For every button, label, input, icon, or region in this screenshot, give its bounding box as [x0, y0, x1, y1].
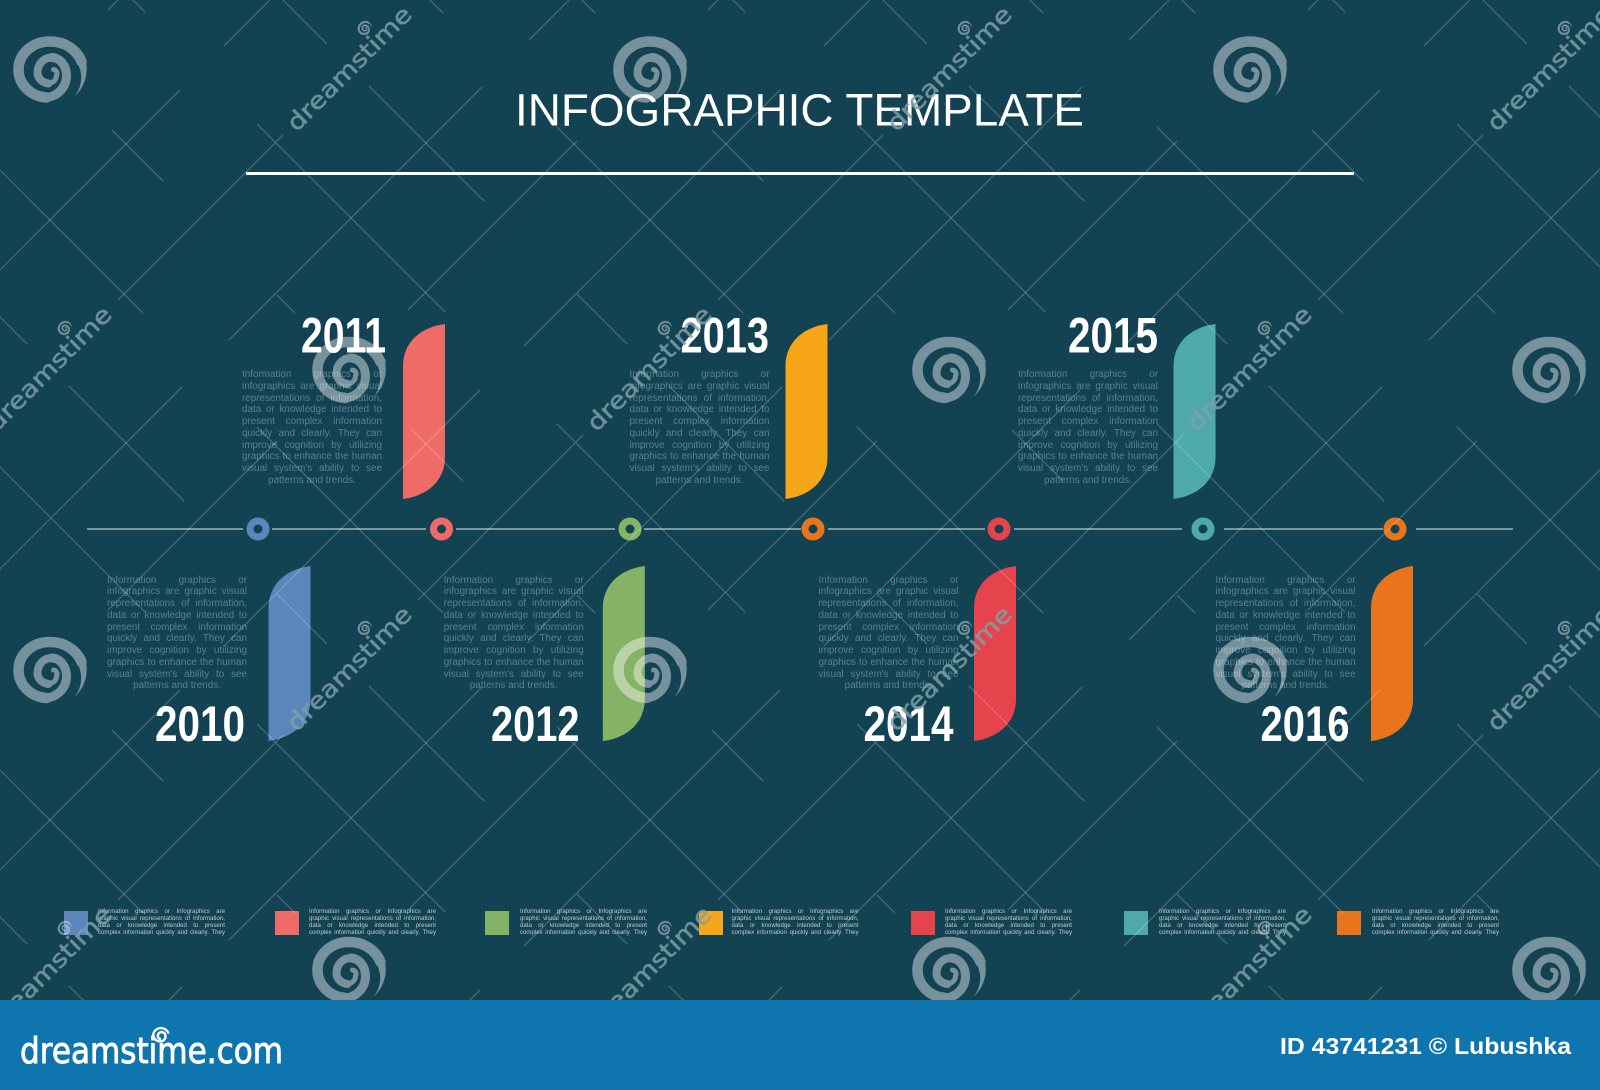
description text: visual system's ability to see	[444, 669, 584, 680]
logo spiral	[153, 1028, 168, 1041]
legend item: blue	[64, 908, 225, 936]
year label 2010: 2010	[155, 696, 245, 752]
legend item: red: data or knowledge intended to present	[945, 922, 1072, 929]
description text: Information graphics or	[818, 575, 958, 586]
description text: quickly and clearly. They can	[242, 428, 382, 439]
description text: graphics to enhance the human	[818, 657, 958, 668]
description text: graphics to enhance the human	[107, 657, 247, 668]
node 2012	[622, 521, 638, 537]
legend item: amber	[699, 908, 858, 936]
description text: visual system's ability to see	[1018, 463, 1158, 474]
description text: infographics are graphic visual	[444, 586, 584, 597]
description text: patterns and trends.	[845, 680, 932, 691]
description text: patterns and trends.	[268, 475, 356, 486]
title: INFOGRAPHIC TEMPLATE	[515, 84, 1084, 136]
description text	[1018, 369, 1158, 486]
description text: representations of information,	[630, 392, 770, 404]
legend item: red: Information graphics or Infographics are	[945, 908, 1072, 914]
description text: present complex information	[107, 622, 247, 633]
year and tab: 2015	[1068, 308, 1216, 499]
description text: visual system's ability to see	[1216, 669, 1356, 680]
description text: representations of information,	[444, 598, 584, 609]
year label 2011: 2011	[301, 308, 386, 364]
panel: 2010	[107, 566, 310, 752]
description text: data or knowledge intended to	[242, 404, 382, 415]
node 2015	[1195, 521, 1211, 537]
description text: data or knowledge intended to	[1216, 610, 1356, 621]
description text: quickly and clearly. They can	[818, 633, 958, 644]
description text: quickly and clearly. They can	[107, 633, 247, 644]
description text: graphics to enhance the human	[242, 451, 382, 462]
legend item: red: complex information quickly and clearly. They	[945, 929, 1072, 936]
colored tab	[974, 566, 1016, 741]
description text	[630, 369, 770, 486]
description text: quickly and clearly. They can	[630, 428, 770, 439]
description text: Information graphics or	[1216, 575, 1356, 586]
node 2011	[434, 521, 450, 537]
description text: graphics to enhance the human	[444, 657, 584, 668]
legend item: green: data or knowledge intended to present	[520, 922, 647, 929]
legend item: amber: Information graphics or Infographics are	[732, 908, 858, 914]
description text: present complex information	[1018, 416, 1158, 427]
node 2016	[1387, 521, 1403, 537]
description text: patterns and trends.	[470, 680, 558, 691]
legend item: blue: Information graphics or Infographics are	[98, 908, 225, 914]
legend item: teal	[1124, 908, 1286, 936]
description text: representations of information,	[1216, 598, 1356, 609]
panel: 2011	[242, 308, 445, 499]
footer logo: dreamstime.com	[20, 1031, 283, 1072]
year label 2016: 2016	[1260, 696, 1349, 752]
colored tab	[1174, 324, 1216, 499]
footer band	[0, 1000, 1600, 1090]
description text: infographics are graphic visual	[630, 381, 770, 392]
panel: 2014	[818, 566, 1016, 752]
description text: present complex information	[818, 622, 958, 633]
legend item: red: graphic visual representations of information,	[945, 915, 1072, 922]
watermark overlay: dreamstime	[1481, 600, 1600, 737]
legend item: coral: graphic visual representations of information,	[309, 915, 436, 922]
colored tab	[785, 324, 827, 499]
description text: representations of information,	[818, 598, 958, 609]
description text: improve cognition by utilizing	[818, 645, 958, 656]
description text: patterns and trends.	[133, 680, 221, 691]
legend item: coral: Information graphics or Infographics are	[309, 908, 436, 914]
description text: present complex information	[242, 416, 382, 427]
description text: data or knowledge intended to	[1018, 404, 1158, 415]
year and tab: 2011	[301, 308, 445, 499]
title underline rule	[246, 172, 1354, 174]
description text: infographics are graphic visual	[1216, 586, 1356, 597]
description text: patterns and trends.	[1242, 680, 1329, 691]
description text: infographics are graphic visual	[1018, 381, 1158, 392]
legend item: green: complex information quickly and clearly. They	[520, 929, 647, 936]
description text	[1216, 575, 1356, 691]
legend item: amber: graphic visual representations of information,	[732, 915, 858, 922]
description text: Information graphics or	[107, 575, 247, 586]
panel: 2016	[1216, 566, 1413, 752]
legend item: orange: graphic visual representations of information,	[1372, 915, 1499, 922]
colored tab	[602, 566, 644, 741]
watermark overlay: dreamstime	[881, 0, 1018, 137]
description text: visual system's ability to see	[242, 463, 382, 474]
watermark overlay: dreamstime	[281, 600, 418, 737]
description text: present complex information	[630, 416, 770, 427]
legend item: orange	[1337, 908, 1499, 936]
timeline axis with colored nodes	[87, 518, 1513, 540]
description text: infographics are graphic visual	[818, 586, 958, 597]
watermark overlay: dreamstime	[1181, 300, 1318, 437]
description text: infographics are graphic visual	[107, 586, 247, 597]
legend item: red	[911, 908, 1072, 936]
description text: quickly and clearly. They can	[444, 633, 584, 644]
legend item: coral: data or knowledge intended to present	[309, 922, 436, 929]
legend item: green: Information graphics or Infographics are	[520, 908, 647, 914]
description text: data or knowledge intended to	[630, 404, 770, 415]
legend item: amber: data or knowledge intended to present	[732, 922, 858, 929]
legend item: teal: data or knowledge intended to present	[1159, 922, 1286, 929]
description text: improve cognition by utilizing	[1018, 440, 1158, 450]
watermark overlay: dreamstime	[881, 600, 1018, 737]
description text: improve cognition by utilizing	[444, 645, 584, 656]
description text: improve cognition by utilizing	[630, 440, 770, 450]
node 2010	[250, 521, 266, 537]
watermark overlay: dreamstime	[581, 300, 718, 437]
description text: present complex information	[1216, 622, 1356, 633]
legend item: blue: data or knowledge intended to present	[98, 922, 225, 929]
description text: visual system's ability to see	[630, 463, 770, 474]
panel: 2012	[444, 566, 645, 752]
year and tab: 2013	[680, 308, 828, 499]
description text: improve cognition by utilizing	[107, 645, 247, 656]
legend item: orange: complex information quickly and clearly. They	[1372, 929, 1499, 936]
description text: graphics to enhance the human	[630, 451, 770, 462]
year and tab: 2012	[491, 566, 645, 752]
description text: data or knowledge intended to	[818, 610, 958, 621]
description text: Information graphics or	[444, 575, 584, 586]
description text: data or knowledge intended to	[107, 610, 247, 621]
node 2014	[991, 521, 1007, 537]
description text: infographics are graphic visual	[242, 381, 382, 392]
legend item: coral	[275, 908, 436, 936]
image id and credit: ID 43741231 © Lubushka	[1280, 1033, 1571, 1059]
panel: 2015	[1018, 308, 1216, 499]
colored tab	[268, 566, 310, 741]
legend item: green	[485, 908, 647, 936]
description text: patterns and trends.	[1044, 475, 1132, 486]
description text	[107, 575, 247, 691]
legend item: teal: graphic visual representations of information,	[1159, 915, 1286, 922]
description text: representations of information,	[242, 392, 382, 404]
legend item: orange: Information graphics or Infographics are	[1372, 908, 1499, 914]
description text	[444, 575, 584, 691]
year label 2012: 2012	[491, 696, 579, 752]
legend item: teal: Information graphics or Infographics are	[1159, 908, 1286, 914]
legend item: blue: graphic visual representations of information,	[98, 915, 225, 922]
year and tab: 2010	[155, 566, 310, 752]
description text: representations of information,	[1018, 392, 1158, 404]
description text: visual system's ability to see	[818, 669, 958, 680]
legend item: coral: complex information quickly and clearly. They	[309, 929, 436, 936]
year and tab: 2016	[1260, 566, 1413, 752]
year label 2013: 2013	[680, 308, 768, 364]
description text: data or knowledge intended to	[444, 610, 584, 621]
watermark overlay: dreamstime	[281, 0, 418, 137]
description text: Information graphics or	[1018, 369, 1158, 380]
description text: visual system's ability to see	[107, 669, 247, 680]
description text: quickly and clearly. They can	[1216, 633, 1356, 644]
legend item: teal: complex information quickly and clearly. They	[1159, 929, 1286, 936]
legend row	[64, 908, 1499, 936]
watermark overlay: dreamstime	[1481, 0, 1600, 137]
description text: improve cognition by utilizing	[1216, 645, 1356, 656]
year and tab: 2014	[863, 566, 1016, 752]
colored tab	[1370, 566, 1412, 741]
legend item: orange: data or knowledge intended to present	[1372, 922, 1499, 929]
description text	[242, 369, 382, 486]
legend item: green: graphic visual representations of information,	[520, 915, 647, 922]
description text: graphics to enhance the human	[1018, 451, 1158, 462]
legend item: blue: complex information quickly and clearly. They	[98, 929, 225, 936]
description text: representations of information,	[107, 598, 247, 609]
description text: improve cognition by utilizing	[242, 440, 382, 450]
node 2013	[805, 521, 821, 537]
description text: Information graphics or	[242, 369, 382, 380]
colored tab	[403, 324, 445, 499]
description text: graphics to enhance the human	[1216, 657, 1356, 668]
description text: Information graphics or	[630, 369, 770, 380]
description text	[818, 575, 958, 691]
description text: patterns and trends.	[656, 475, 743, 486]
description text: quickly and clearly. They can	[1018, 428, 1158, 439]
legend item: amber: complex information quickly and clearly. They	[732, 929, 858, 936]
year label 2014: 2014	[863, 696, 953, 752]
description text: present complex information	[444, 622, 584, 633]
year label 2015: 2015	[1068, 308, 1158, 364]
panel: 2013	[630, 308, 828, 499]
